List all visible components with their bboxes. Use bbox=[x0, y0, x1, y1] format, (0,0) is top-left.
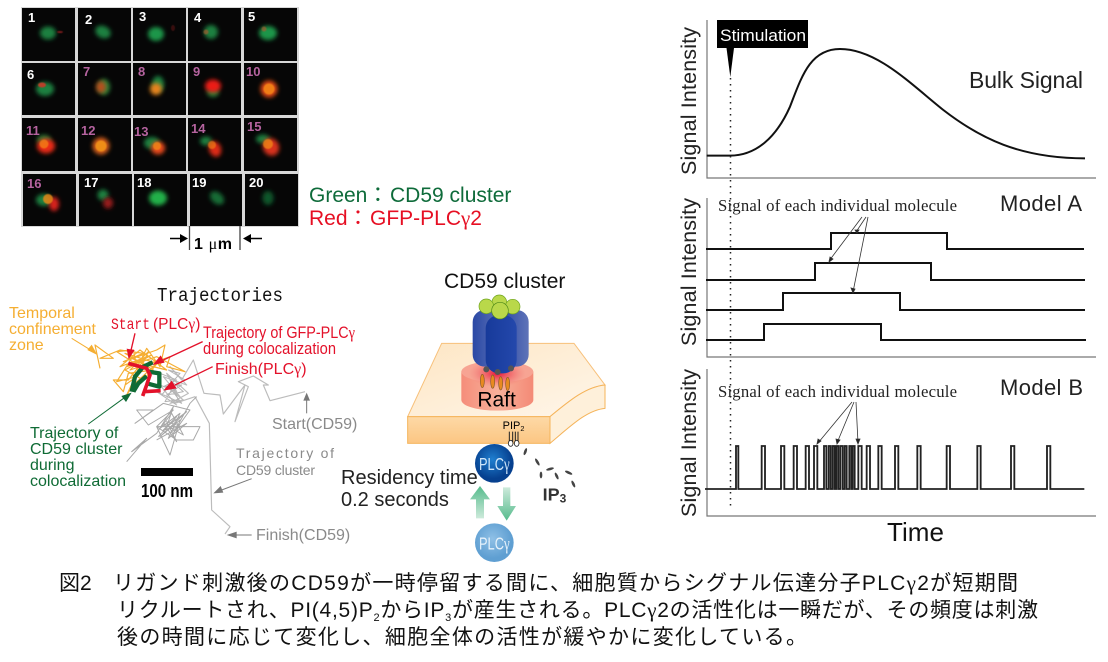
trajectory labels bbox=[9, 305, 357, 544]
label: trajectory of CD59 bbox=[236, 445, 334, 478]
lipids bbox=[480, 374, 510, 391]
PIP2 lipids bbox=[503, 420, 524, 446]
label: GFP-PLC trajectory: Trajectory of GFP-PLCγ bbox=[203, 323, 355, 342]
tile 3: 3 bbox=[139, 9, 146, 24]
axis label: Signal Intensity bbox=[677, 369, 701, 517]
caption: からIP bbox=[380, 599, 444, 622]
tile 11 bbox=[22, 118, 75, 171]
label: temporal confinement zone: zone bbox=[9, 337, 44, 354]
arrow: temporal zone bbox=[72, 338, 97, 355]
tile 20: 20 bbox=[249, 175, 263, 190]
tile 19 bbox=[190, 174, 242, 226]
stimulation marker: Stimulation bbox=[720, 26, 806, 45]
axis label: Signal Intensity bbox=[677, 27, 701, 175]
tile 9: 9 bbox=[193, 64, 200, 79]
label: start CD59: Start(CD59) bbox=[272, 416, 357, 433]
CD59 grey trajectory bbox=[127, 360, 305, 534]
tile 4 bbox=[188, 8, 241, 61]
tile 7: 7 bbox=[83, 64, 90, 79]
label: residency time: Residency time bbox=[341, 467, 478, 489]
arrow: start PLC bbox=[127, 333, 135, 359]
panel: microscopy image series bbox=[21, 7, 299, 227]
label: finish PLC: Finish(PLCγ) bbox=[215, 361, 307, 378]
tile 8 bbox=[133, 63, 186, 115]
arrow: green trajectory bbox=[88, 393, 132, 424]
label: GFP-PLC trajectory bbox=[203, 323, 355, 358]
tile 19: 19 bbox=[192, 175, 206, 190]
tile 1 bbox=[22, 8, 75, 61]
PLC red colocalization trajectory bbox=[128, 363, 161, 396]
tile 12: 12 bbox=[81, 123, 95, 138]
caption: リガンド刺激後のCD59が一時停留する間に、細胞質からシグナル伝達分子PLCγ2が短期間 bbox=[113, 571, 1018, 595]
label: bulk signal: Bulk Signal bbox=[969, 67, 1083, 93]
tile 14: 14 bbox=[191, 121, 206, 136]
tile 11: 11 bbox=[26, 123, 40, 138]
caption: リクルートされ、PI(4,5)P bbox=[117, 599, 373, 622]
tile 16: 16 bbox=[27, 176, 41, 191]
label: raft: Raft bbox=[477, 389, 516, 412]
label: model A: Model A bbox=[1000, 191, 1082, 216]
tile 18: 18 bbox=[137, 175, 151, 190]
tile 2 bbox=[78, 8, 131, 61]
tile 2: 2 bbox=[85, 12, 92, 27]
arrow: PLC trajectory bbox=[153, 342, 203, 365]
axis label: Signal Intensity bbox=[677, 198, 701, 346]
stimulation marker bbox=[717, 20, 808, 77]
membrane slab bbox=[408, 343, 605, 443]
tile 13: 13 bbox=[134, 124, 148, 139]
caption bbox=[59, 571, 1038, 649]
tile 13 bbox=[133, 118, 186, 171]
tile 3 bbox=[133, 8, 186, 61]
scale bar: 100 nm bbox=[141, 468, 193, 501]
PIP2 lipids: 2 bbox=[520, 424, 524, 433]
IP3 fragments bbox=[523, 448, 576, 488]
tile 15 bbox=[244, 118, 297, 171]
tile 18 bbox=[134, 174, 187, 226]
tile 6: 6 bbox=[27, 67, 34, 82]
molecule arrows bbox=[817, 402, 860, 444]
label: CD59 cluster: CD59 cluster bbox=[444, 270, 565, 293]
tile 20 bbox=[245, 174, 298, 226]
label: start PLC: (PLCγ) bbox=[153, 316, 200, 333]
colour legend bbox=[309, 184, 511, 230]
tile 12 bbox=[78, 118, 131, 171]
label: temporal confinement zone: confinement bbox=[9, 321, 97, 338]
label: start PLC: Start bbox=[111, 316, 150, 334]
tile 15: 15 bbox=[247, 119, 261, 134]
label: temporal confinement zone: Temporal bbox=[9, 305, 75, 322]
label: IP3: 3 bbox=[560, 492, 567, 506]
legend: green bbox=[309, 184, 511, 207]
legend: green: Green： bbox=[309, 184, 388, 207]
label: CD59 trajectory colocalization: during bbox=[30, 457, 74, 474]
label: trajectory of CD59: CD59 cluster bbox=[236, 462, 315, 478]
legend: green: CD59 cluster bbox=[390, 184, 511, 207]
tile 4: 4 bbox=[194, 10, 202, 25]
tile 8: 8 bbox=[138, 64, 145, 79]
tile 7 bbox=[78, 63, 131, 115]
label: residency time bbox=[341, 467, 478, 511]
legend: red: GFP-PLCγ2 bbox=[370, 206, 482, 230]
arrow: finish CD59 bbox=[227, 532, 252, 538]
tile 16 bbox=[23, 174, 76, 226]
raft cylinder bbox=[461, 359, 533, 411]
label: residency time: 0.2 seconds bbox=[341, 489, 449, 511]
scale bar: 1 micrometer: 1 μm bbox=[194, 236, 232, 253]
temporal confinement orange trajectory bbox=[95, 345, 185, 395]
scale bar: 1 micrometer bbox=[170, 226, 262, 253]
arrow: recruitment bbox=[470, 486, 490, 518]
scale bar: 100 nm: 100 nm bbox=[141, 481, 193, 501]
label: finish CD59: Finish(CD59) bbox=[256, 527, 350, 544]
tile 6 bbox=[22, 63, 75, 115]
legend: red bbox=[309, 206, 482, 230]
CD59 green colocalization trajectory bbox=[132, 362, 159, 392]
tile 17: 17 bbox=[84, 175, 98, 190]
caption: γ2の活性化は一瞬だが、その頻度は刺激 bbox=[647, 598, 1038, 622]
label: GFP-PLC trajectory: during colocalization bbox=[203, 339, 336, 358]
molecule arrows bbox=[829, 217, 868, 293]
chart: model B bbox=[677, 369, 1096, 547]
arrow: CD59 trajectory bbox=[213, 479, 252, 493]
legend: red: Red： bbox=[309, 207, 369, 230]
chart: bulk signal bbox=[677, 20, 1096, 178]
chart: trajectories bbox=[72, 333, 310, 538]
label: individual molecule: Signal of each individual molecule bbox=[718, 382, 957, 401]
PLC gamma active: PLCγ bbox=[479, 454, 510, 474]
caption: 2 bbox=[373, 612, 380, 624]
caption: 後の時間に応じて変化し、細胞全体の活性が緩やかに変化している。 bbox=[117, 626, 807, 649]
tile 5: 5 bbox=[248, 9, 255, 24]
tile 17 bbox=[79, 174, 132, 226]
CD59 protein barrels bbox=[473, 295, 529, 375]
PIP2 lipids: PIP bbox=[503, 420, 520, 432]
label: trajectory of CD59: Trajectory of bbox=[236, 445, 334, 461]
arrow: finish PLC bbox=[163, 367, 213, 391]
arrow: release bbox=[497, 487, 516, 521]
label: individual molecule: Signal of each individual molecule bbox=[718, 196, 957, 215]
PLC gamma inactive bbox=[475, 523, 514, 562]
label: CD59 trajectory colocalization bbox=[30, 425, 126, 490]
caption: 3 bbox=[445, 612, 451, 624]
tile 1: 1 bbox=[28, 10, 35, 25]
heading: Trajectories: Trajectories bbox=[157, 285, 283, 307]
label: CD59 trajectory colocalization: colocalization bbox=[30, 473, 126, 490]
PLC gamma inactive: PLCγ bbox=[479, 533, 510, 553]
label: start PLC bbox=[111, 316, 200, 334]
label: IP3: IP bbox=[543, 485, 560, 505]
diagram: CD59 cluster on raft bbox=[408, 295, 605, 562]
tile 14 bbox=[188, 118, 241, 171]
stimulation dotted line bbox=[730, 78, 732, 507]
label: CD59 trajectory colocalization: CD59 cluster bbox=[30, 441, 123, 458]
caption: 図2 bbox=[59, 572, 92, 595]
tile 10 bbox=[244, 63, 297, 115]
label: temporal confinement zone bbox=[9, 305, 97, 354]
tile 9 bbox=[188, 63, 241, 115]
label: time: Time bbox=[887, 517, 944, 547]
tile 10: 10 bbox=[246, 64, 260, 79]
chart: model A bbox=[677, 191, 1096, 357]
label: model B: Model B bbox=[1000, 375, 1083, 400]
caption: が産生される。PLC bbox=[452, 599, 646, 622]
label: CD59 trajectory colocalization: Trajectory of bbox=[30, 425, 119, 442]
arrow: start CD59 bbox=[303, 393, 310, 413]
tile 5 bbox=[244, 8, 297, 61]
PLC gamma active bbox=[475, 444, 514, 483]
